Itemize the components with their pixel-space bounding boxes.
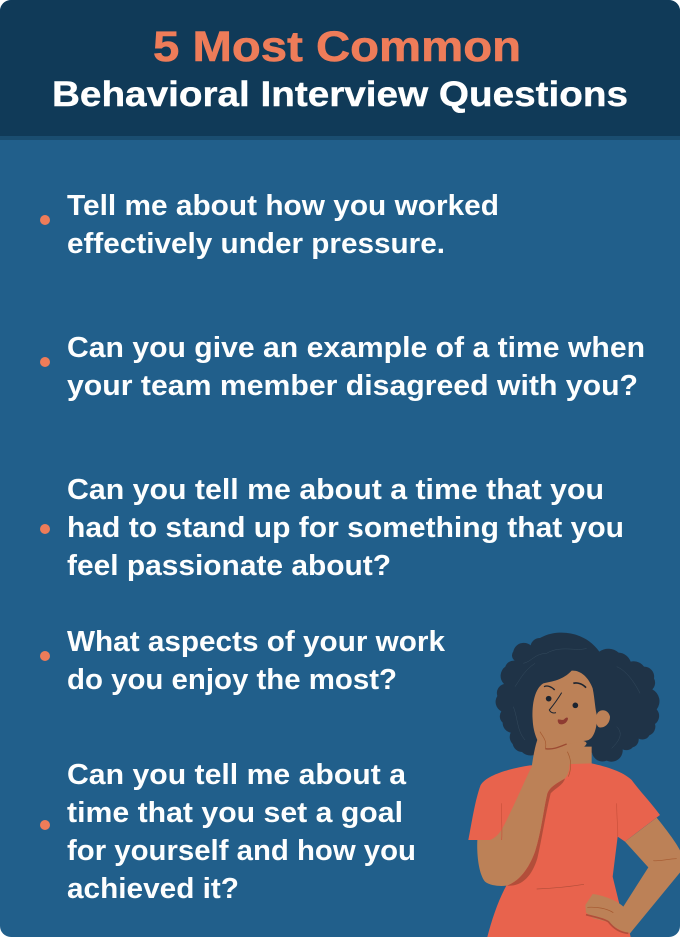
forearm shadow: [507, 778, 565, 886]
illustration: thinking woman: [468, 633, 680, 937]
question 3: Can you tell me about a time that you: [67, 474, 604, 506]
question 5: time that you set a goal: [67, 797, 403, 829]
right arm and hand: [585, 818, 680, 933]
left arm: [477, 733, 587, 886]
question 5: Can you tell me about a: [67, 759, 407, 791]
title: Behavioral Interview Questions: [52, 75, 628, 114]
hair: [496, 633, 659, 762]
header band: [0, 0, 680, 140]
question 3: [40, 474, 624, 582]
ear: [596, 710, 610, 727]
question 2: [40, 332, 645, 402]
hair strands: [513, 648, 640, 748]
question 1: Tell me about how you worked: [67, 190, 499, 222]
question 2: your team member disagreed with you?: [67, 370, 638, 402]
question 4: do you enjoy the most?: [67, 664, 397, 696]
hand details: [540, 732, 677, 933]
shirt details: [501, 803, 618, 889]
question 3: had to stand up for something that you: [67, 512, 624, 544]
face: [532, 671, 597, 751]
neck: [544, 746, 592, 764]
question 2: Can you give an example of a time when: [67, 332, 645, 364]
shirt: [468, 763, 660, 937]
question 3: feel passionate about?: [67, 550, 391, 582]
title: [52, 23, 628, 114]
question 1: [40, 190, 499, 260]
facial features: [544, 683, 586, 724]
question 5: achieved it?: [67, 873, 239, 905]
question 5: for yourself and how you: [67, 835, 416, 867]
question 1: effectively under pressure.: [67, 228, 445, 260]
question 4: What aspects of your work: [67, 626, 446, 658]
title: 5 Most Common: [153, 23, 521, 71]
question 4: [40, 626, 446, 696]
question 5: [40, 759, 416, 905]
